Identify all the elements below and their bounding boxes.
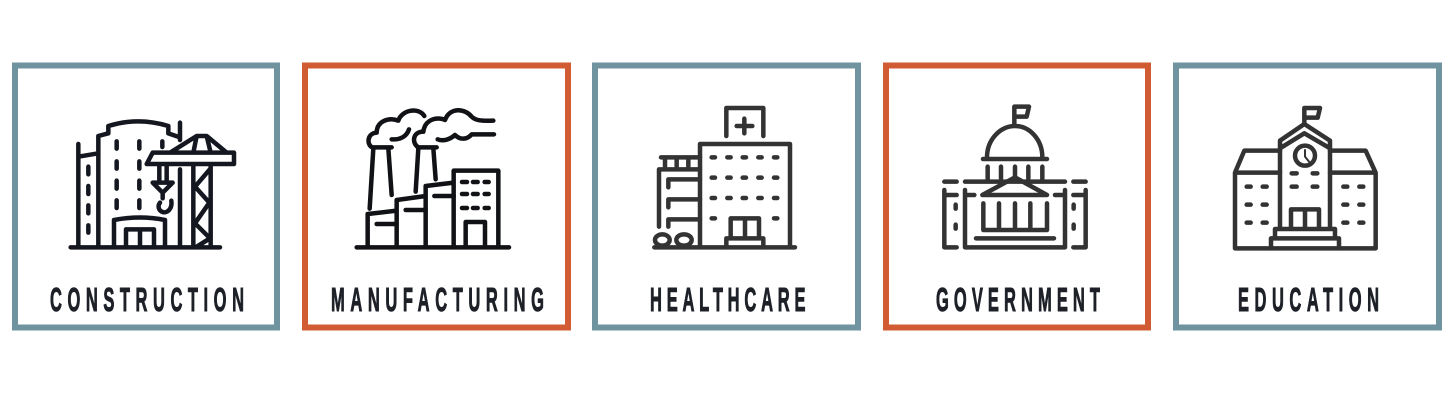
panel: education <box>1176 66 1439 328</box>
panel: healthcare <box>595 66 858 328</box>
icon: factory with smoke <box>357 110 509 247</box>
panel border: manufacturing <box>305 66 568 328</box>
panel border: healthcare <box>595 66 858 328</box>
label: construction: CONSTRUCTION <box>50 281 244 319</box>
panel border: education <box>1176 66 1439 328</box>
label: government: GOVERNMENT <box>936 281 1100 319</box>
panel border: government <box>886 66 1148 328</box>
panel: manufacturing <box>305 66 568 328</box>
panel: construction <box>15 66 277 328</box>
panel border: construction <box>15 66 277 328</box>
label: healthcare: HEALTHCARE <box>650 281 806 319</box>
icon: building with crane <box>71 121 234 247</box>
label: education: EDUCATION <box>1238 281 1379 319</box>
panel: government <box>886 66 1148 328</box>
icon: capitol building <box>944 107 1086 247</box>
icon: school <box>1235 108 1376 248</box>
label: manufacturing: MANUFACTURING <box>331 281 544 319</box>
icon: hospital <box>654 108 795 247</box>
